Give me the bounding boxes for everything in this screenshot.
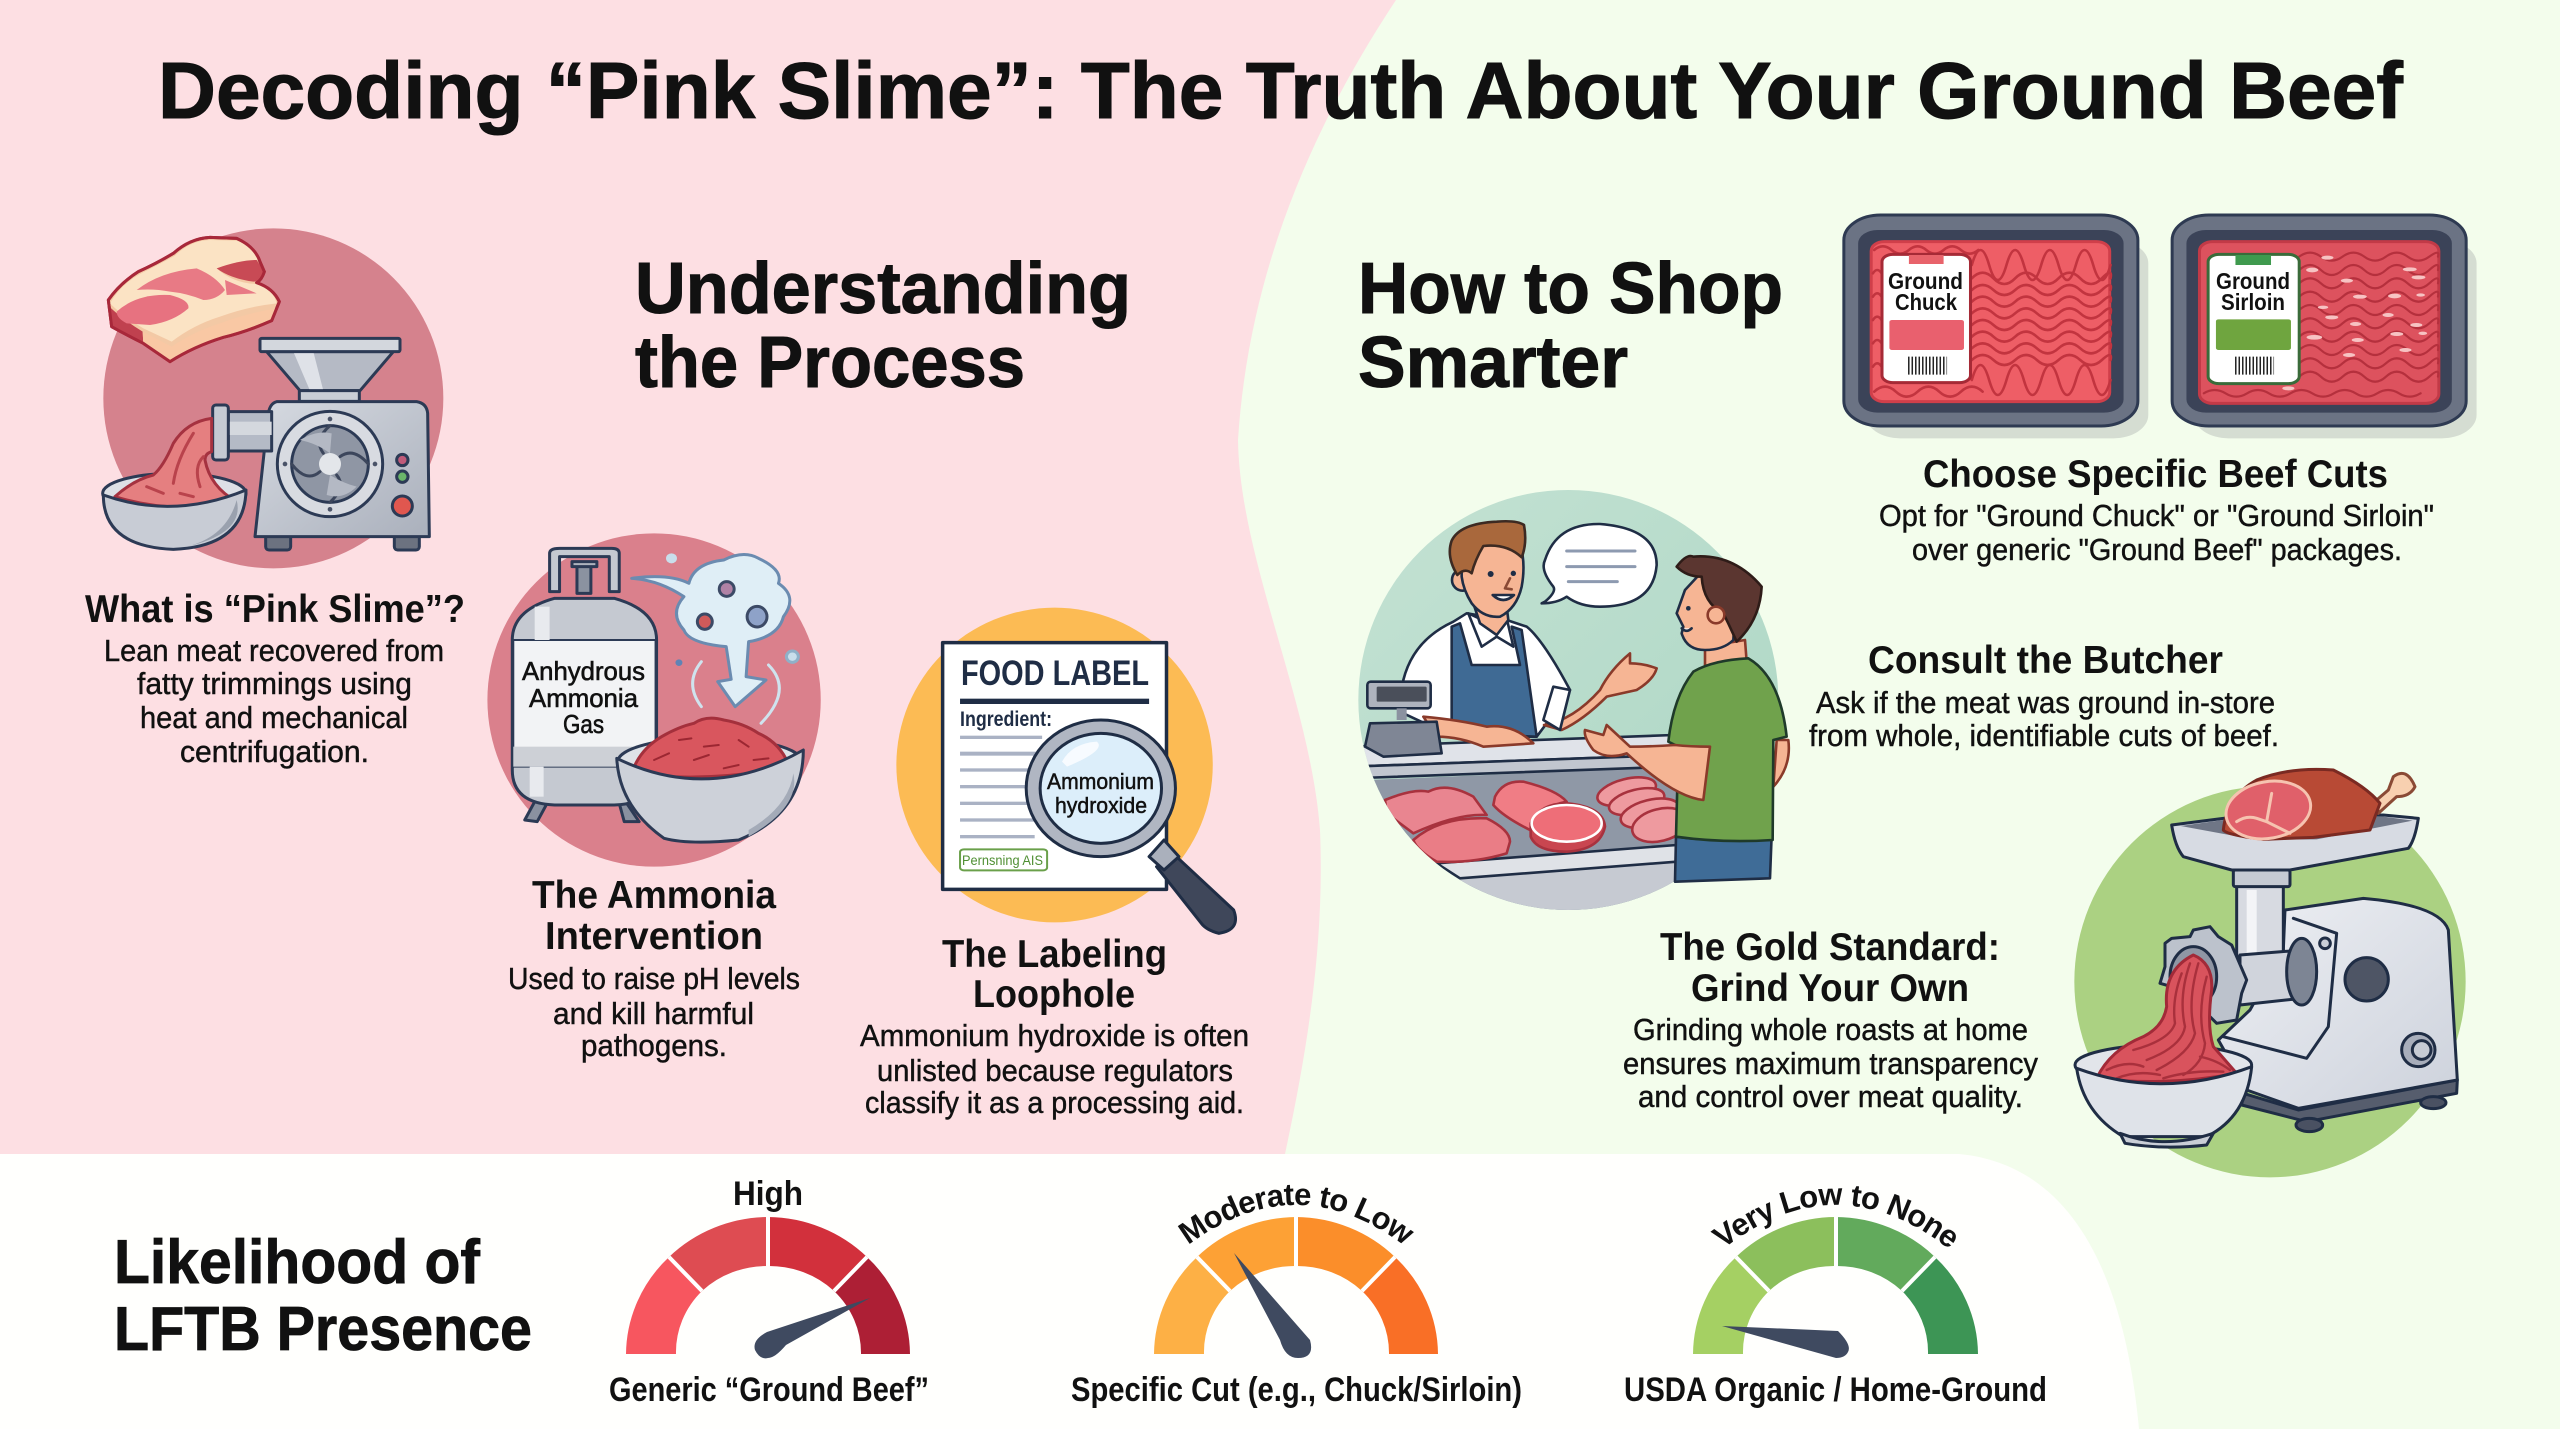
icon: ground chuck tray	[1844, 215, 2148, 438]
text block: The Ammonia Intervention: pathogens.	[581, 1028, 727, 1063]
text block: Consult the Butcher	[1809, 639, 2279, 753]
text block: Consult the Butcher: Ask if the meat was ground in-store	[1816, 685, 2275, 720]
gauge: Moderate to Low	[1154, 1184, 1438, 1358]
text block: The Labeling Loophole: classify it as a processing aid.	[865, 1085, 1244, 1120]
heading: How to Shop Smarter: Smarter	[1358, 323, 1628, 403]
icon: ground sirloin tray	[2172, 215, 2477, 438]
title: Decoding “Pink Slime”: The Truth About Your Ground Beef	[158, 46, 2403, 135]
icon: home meat grinder with roast	[2074, 769, 2466, 1177]
text block: The Ammonia Intervention: The Ammonia	[532, 874, 776, 917]
gauge label: Moderate to Low: Moderate to Low	[1178, 1184, 1414, 1244]
tank label text: Anhydrous	[522, 656, 645, 686]
text block: What is Pink Slime: centrifugation.	[180, 734, 369, 769]
text block: What is Pink Slime: heat and mechanical	[140, 700, 408, 735]
icon: ammonia tank and bowl	[487, 533, 821, 867]
text block: Choose Specific Beef Cuts	[1879, 453, 2434, 567]
text block: What is Pink Slime: fatty trimmings using	[137, 666, 412, 701]
text block: The Gold Standard	[1623, 926, 2038, 1114]
gauge caption: Generic Ground Beef: Generic “Ground Beef”	[609, 1371, 929, 1409]
tray label: Ground Sirloin: Sirloin	[2221, 289, 2285, 315]
heading: How to Shop Smarter	[1358, 249, 1783, 403]
tray label: Ground Chuck: Chuck	[1895, 289, 1957, 315]
tray label: Ground Chuck: Ground	[1888, 268, 1963, 294]
icon: meat grinder with pink slime	[103, 228, 443, 568]
gauge caption: Specific Cut: Specific Cut (e.g., Chuck/Sirloin)	[1071, 1371, 1522, 1409]
text block: The Gold Standard: and control over meat quality.	[1638, 1079, 2023, 1114]
gauge needle	[1234, 1253, 1311, 1358]
heading: Understanding the Process: Understanding	[635, 249, 1131, 329]
heading: Likelihood of LFTB Presence	[114, 1228, 532, 1364]
tank label text: Ammonia	[529, 683, 639, 713]
text block: Consult the Butcher: Consult the Butcher	[1868, 639, 2223, 682]
text block: The Ammonia Intervention: and kill harmful	[553, 996, 754, 1031]
text block: The Labeling Loophole: Ammonium hydroxide is often	[860, 1018, 1249, 1053]
tray label: Ground Sirloin	[2216, 268, 2290, 315]
gauge label: High: High	[733, 1175, 803, 1213]
text block: What is Pink Slime	[85, 588, 465, 769]
heading: How to Shop Smarter: How to Shop	[1358, 249, 1783, 329]
heading: Likelihood of LFTB Presence: Likelihood of	[114, 1228, 480, 1297]
text block: Consult the Butcher: from whole, identifiable cuts of beef.	[1809, 718, 2279, 753]
text block: The Ammonia Intervention	[508, 874, 800, 1063]
food label text: hydroxide	[1055, 793, 1147, 818]
text block: Choose Specific Beef Cuts: Opt for "Ground Chuck" or "Ground Sirloin"	[1879, 498, 2434, 533]
text block: What is Pink Slime: Lean meat recovered from	[104, 633, 444, 668]
text block: The Gold Standard: Grinding whole roasts at home	[1633, 1012, 2028, 1047]
food label text: Pernsning AIS	[962, 852, 1043, 868]
gauge needle	[1722, 1326, 1849, 1358]
heading: Likelihood of LFTB Presence: LFTB Presence	[114, 1295, 532, 1364]
gauge caption: USDA Organic / Home-Ground: USDA Organic / Home-Ground	[1624, 1371, 2047, 1409]
icon: food label with magnifying glass	[896, 608, 1236, 933]
text block: The Labeling Loophole: unlisted because regulators	[877, 1053, 1233, 1088]
icon: butcher and customer at counter	[1352, 490, 1789, 913]
tray label: Ground Sirloin: Ground	[2216, 268, 2290, 294]
gauge needle	[754, 1298, 870, 1358]
gauge label: Very Low to None: Very Low to None	[1710, 1186, 1956, 1247]
heading: Understanding the Process: the Process	[635, 323, 1025, 403]
tray label: Ground Chuck	[1888, 268, 1963, 315]
food label text: Ammonium	[1047, 769, 1154, 794]
tank label text	[522, 656, 645, 739]
text block: Choose Specific Beef Cuts: Choose Specific Beef Cuts	[1923, 453, 2388, 496]
heading: Understanding the Process	[635, 249, 1131, 403]
text block: The Ammonia Intervention: Used to raise pH levels	[508, 961, 800, 996]
food label text	[960, 654, 1154, 868]
text block: The Labeling Loophole: The Labeling	[942, 933, 1167, 976]
text block: The Gold Standard: The Gold Standard:	[1660, 926, 2000, 969]
text block: The Labeling Loophole: Loophole	[973, 973, 1135, 1016]
gauge: Very Low to None	[1693, 1186, 1978, 1358]
text block: The Gold Standard: Grind Your Own	[1691, 967, 1969, 1010]
gauge: High	[626, 1175, 910, 1358]
text block: The Ammonia Intervention: Intervention	[545, 915, 763, 958]
food label text: Ingredient:	[960, 708, 1052, 731]
tank label text: Gas	[563, 709, 604, 739]
text block: The Labeling Loophole	[860, 933, 1249, 1120]
text block: What is Pink Slime: What is “Pink Slime”?	[85, 588, 465, 631]
text block: The Gold Standard: ensures maximum transparency	[1623, 1046, 2038, 1081]
food label text: FOOD LABEL	[961, 654, 1149, 693]
text block: Choose Specific Beef Cuts: over generic "Ground Beef" packages.	[1912, 532, 2402, 567]
